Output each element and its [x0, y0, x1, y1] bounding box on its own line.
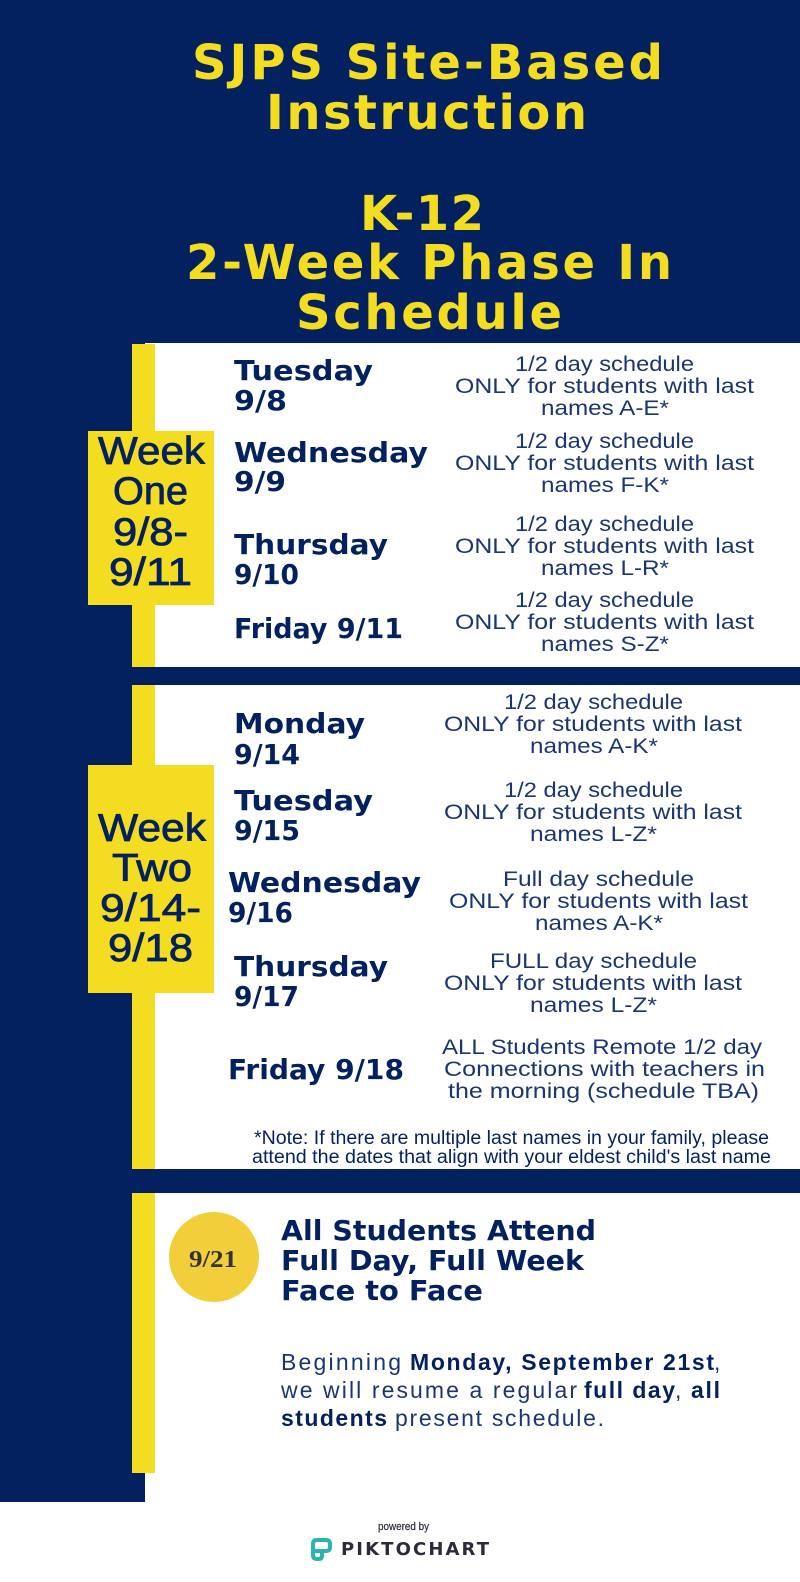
- body text: return to regular schedule: we will resume a regular: [280, 1377, 577, 1403]
- day: Wednesday 9/9: [234, 436, 428, 498]
- title: K-12: [360, 186, 484, 242]
- schedule: Wednesday 9/16: Full day schedule: [503, 868, 694, 891]
- schedule: Monday 9/14: [444, 691, 742, 758]
- schedule: Wednesday 9/9: [455, 430, 754, 497]
- schedule: Thursday 9/17: ONLY for students with last: [444, 972, 742, 995]
- panel: week two label: Two: [112, 847, 192, 890]
- panel: week one label: Week: [98, 430, 206, 473]
- body text: return to regular schedule: Monday, September 21st: [410, 1349, 714, 1375]
- body text: return to regular schedule: ,: [714, 1349, 720, 1375]
- date badge: 9/21: 9/21: [189, 1247, 237, 1273]
- body text: return to regular schedule: Beginning: [281, 1349, 401, 1375]
- schedule: Wednesday 9/16: names A-K*: [535, 912, 663, 935]
- body text: return to regular schedule: students: [281, 1405, 387, 1431]
- day: Thursday 9/17: 9/17: [234, 980, 299, 1013]
- day: Tuesday 9/8: [234, 354, 373, 417]
- footer: powered by Piktochart: powered by: [378, 1521, 429, 1533]
- schedule: Friday 9/18: Connections with teachers in: [444, 1058, 765, 1081]
- body text: return to regular schedule: all: [691, 1377, 720, 1403]
- panel: week two label: 9/14-: [100, 887, 201, 930]
- schedule: Tuesday 9/8: ONLY for students with last: [455, 375, 754, 398]
- schedule: Friday 9/11: [455, 589, 754, 656]
- schedule: Thursday 9/17: FULL day schedule: [490, 950, 697, 973]
- body text: return to regular schedule: ,: [675, 1377, 681, 1403]
- schedule: Monday 9/14: ONLY for students with last: [444, 713, 742, 736]
- schedule: Tuesday 9/8: [455, 353, 754, 420]
- schedule: Tuesday 9/15: names L-Z*: [530, 823, 657, 846]
- schedule: Tuesday 9/15: ONLY for students with last: [444, 801, 742, 824]
- schedule: Thursday 9/10: [455, 513, 754, 580]
- panel: week two label: Week: [98, 807, 207, 850]
- day: Friday 9/11: Friday 9/11: [234, 612, 403, 645]
- schedule: Tuesday 9/15: 1/2 day schedule: [504, 779, 683, 802]
- panel: week one label: [88, 430, 214, 605]
- day: Monday 9/14: [234, 707, 365, 771]
- schedule: Friday 9/18: the morning (schedule TBA): [448, 1080, 759, 1103]
- schedule: Wednesday 9/9: 1/2 day schedule: [515, 430, 694, 453]
- day: Thursday 9/10: 9/10: [234, 558, 299, 591]
- schedule: Wednesday 9/16: ONLY for students with last: [449, 890, 748, 913]
- body text: return to regular schedule: present schedule.: [395, 1405, 604, 1431]
- heading: all students attend: Face to Face: [281, 1274, 483, 1307]
- schedule: Wednesday 9/9: ONLY for students with last: [455, 452, 754, 475]
- note: *Note: If there are multiple last names in your family, please: [254, 1128, 769, 1149]
- day: Wednesday 9/16: Wednesday: [228, 866, 421, 899]
- day: Wednesday 9/9: 9/9: [234, 465, 286, 498]
- day: Thursday 9/17: Thursday: [234, 950, 388, 983]
- schedule: Friday 9/11: 1/2 day schedule: [515, 589, 694, 612]
- yellow timeline bar: week two: [132, 685, 155, 1169]
- schedule: Tuesday 9/8: names A-E*: [541, 397, 669, 420]
- schedule: Wednesday 9/16: [449, 868, 748, 935]
- day: Thursday 9/17: [234, 950, 388, 1013]
- schedule: Friday 9/11: ONLY for students with last: [455, 611, 754, 634]
- title: SJPS Site-Based: [192, 35, 663, 91]
- title: Instruction: [266, 85, 587, 141]
- icon: Piktochart logo: [313, 1540, 330, 1559]
- day: Tuesday 9/8: Tuesday: [234, 354, 373, 387]
- day: Wednesday 9/9: Wednesday: [234, 436, 428, 469]
- day: Wednesday 9/16: 9/16: [228, 896, 293, 929]
- yellow timeline bar: week one: [132, 344, 155, 667]
- day: Thursday 9/10: Thursday: [234, 528, 388, 561]
- panel: week two label: [88, 765, 214, 993]
- day: Tuesday 9/15: Tuesday: [234, 784, 373, 817]
- schedule: Friday 9/18: ALL Students Remote 1/2 day: [442, 1036, 763, 1059]
- yellow timeline bar: final section: [132, 1193, 155, 1473]
- panel: week one label: 9/11: [109, 551, 192, 594]
- day: Monday 9/14: Monday: [234, 707, 365, 740]
- schedule: Friday 9/11: names S-Z*: [541, 633, 669, 656]
- heading: all students attend: Full Day, Full Week: [281, 1244, 585, 1277]
- panel: week one label: 9/8-: [113, 511, 188, 554]
- schedule: Wednesday 9/9: names F-K*: [541, 474, 669, 497]
- schedule: Tuesday 9/8: 1/2 day schedule: [515, 353, 694, 376]
- day: Wednesday 9/16: [228, 866, 421, 929]
- schedule: Tuesday 9/15: [444, 779, 742, 846]
- footer: powered by Piktochart: PIKTOCHART: [341, 1539, 490, 1560]
- schedule: Thursday 9/17: names L-Z*: [530, 994, 657, 1017]
- title: Schedule: [296, 285, 562, 341]
- title: [186, 35, 672, 341]
- schedule: Monday 9/14: names A-K*: [530, 735, 658, 758]
- heading: all students attend: All Students Attend: [281, 1214, 596, 1247]
- day: Monday 9/14: 9/14: [234, 738, 300, 771]
- footer: powered by Piktochart: [313, 1521, 490, 1560]
- body text: return to regular schedule: full day: [584, 1377, 675, 1403]
- schedule: Monday 9/14: 1/2 day schedule: [504, 691, 683, 714]
- schedule: Thursday 9/17: [444, 950, 742, 1017]
- day: Tuesday 9/8: 9/8: [234, 384, 287, 417]
- day: Tuesday 9/15: 9/15: [234, 814, 300, 847]
- schedule: Friday 9/18: [442, 1036, 765, 1103]
- heading: all students attend: [281, 1214, 596, 1307]
- day: Thursday 9/10: [234, 528, 388, 591]
- day: Friday 9/18: Friday 9/18: [228, 1053, 404, 1086]
- panel: week two label: 9/18: [108, 927, 193, 970]
- schedule: Thursday 9/10: 1/2 day schedule: [515, 513, 694, 536]
- title: 2-Week Phase In: [186, 235, 672, 291]
- date badge: 9/21: [169, 1212, 259, 1302]
- note: attend the dates that align with your eldest child's last name: [252, 1147, 771, 1168]
- schedule: Thursday 9/10: ONLY for students with last: [455, 535, 754, 558]
- schedule: Thursday 9/10: names L-R*: [541, 557, 669, 580]
- body text: return to regular schedule: [280, 1349, 720, 1431]
- day: Tuesday 9/15: [234, 784, 373, 847]
- note: [252, 1128, 771, 1168]
- panel: week one label: One: [113, 470, 188, 513]
